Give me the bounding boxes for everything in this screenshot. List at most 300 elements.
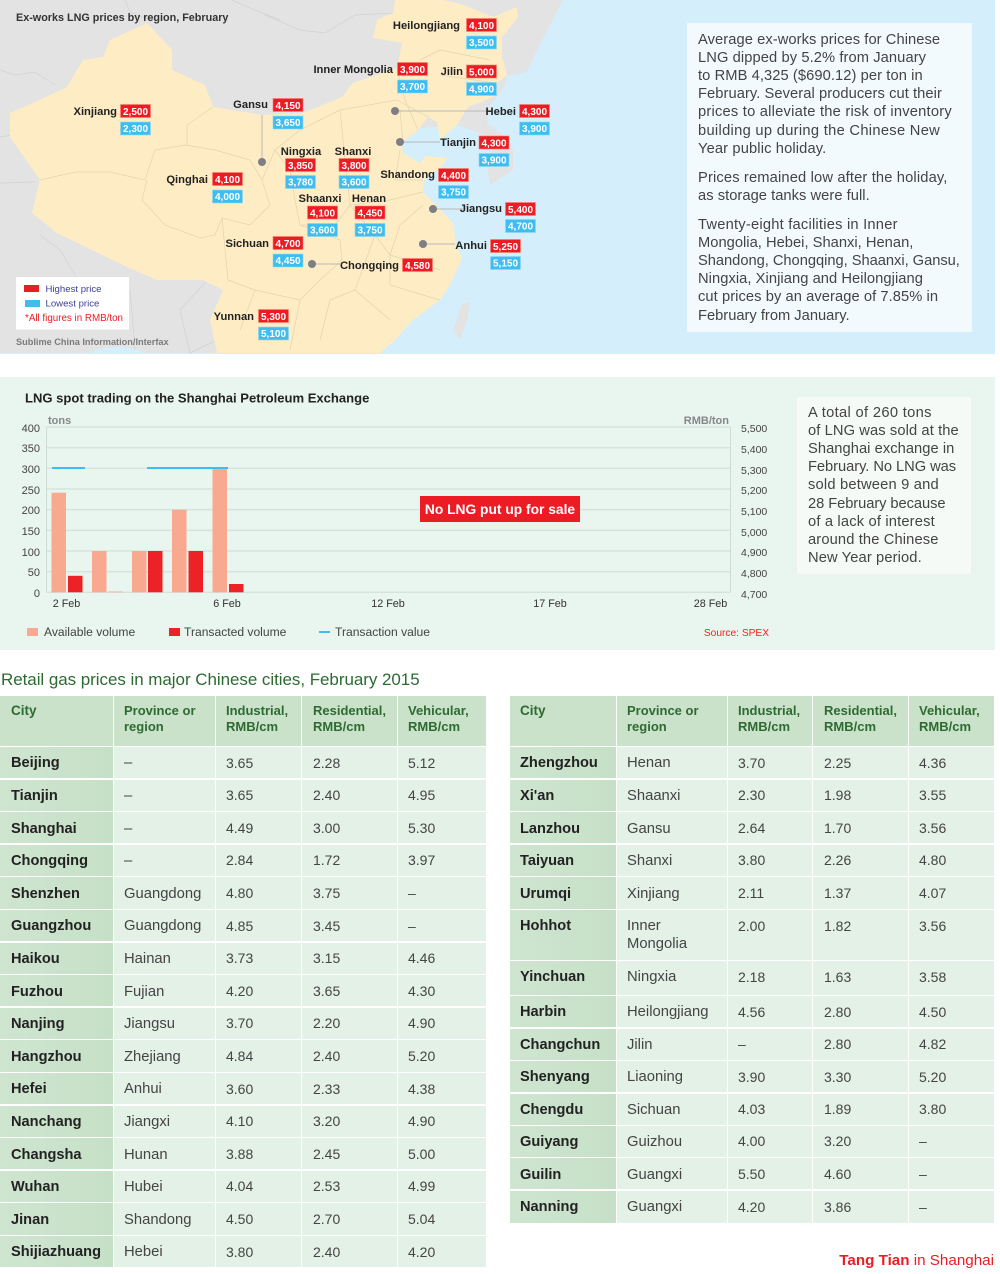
left axis labels: 400	[22, 423, 40, 435]
row: Wuhan: 4.04	[226, 1178, 253, 1194]
left axis labels: 0	[34, 588, 40, 600]
row: Changsha: Hunan	[124, 1147, 168, 1163]
row: Taiyuan: Shanxi	[627, 853, 672, 869]
paragraph: price dip: Average ex-works prices for Chinese	[698, 32, 940, 48]
row: Jinan: Jinan	[11, 1212, 49, 1228]
row: Lanzhou: 2.64	[738, 820, 765, 836]
header row: City	[520, 703, 546, 718]
row: Jinan: 5.04	[408, 1211, 435, 1227]
Jilin: Jilin	[441, 66, 463, 78]
available volume bars	[52, 468, 227, 592]
callout: no LNG put up for sale	[420, 496, 580, 522]
row: Guiyang	[510, 1126, 994, 1157]
row: Shenyang: Liaoning	[627, 1069, 683, 1085]
Chongqing: 4,580	[405, 261, 430, 272]
row: Shenzhen: Shenzhen	[11, 886, 80, 902]
row: Shenyang: 3.30	[824, 1069, 851, 1085]
leader lines and markers	[258, 107, 487, 268]
paragraph: price dip	[698, 32, 952, 157]
paragraph: price dip: building up during the Chinese New	[698, 123, 940, 139]
header row: Province or	[627, 703, 699, 718]
row: Hangzhou	[0, 1040, 486, 1072]
title: Ex-works LNG prices by region, February	[16, 12, 228, 24]
row: Zhengzhou	[510, 747, 994, 778]
Ningxia: 3,850	[288, 161, 313, 172]
paragraph: storage tanks: as storage tanks were full.	[698, 188, 870, 204]
text panel: exchange summary	[797, 396, 971, 574]
Yunnan: Yunnan	[214, 311, 254, 323]
header row: region	[627, 719, 667, 734]
right axis labels: 5,300	[741, 465, 767, 477]
paragraph: exchange volume: around the Chinese	[808, 532, 939, 548]
Henan: Henan	[352, 193, 386, 205]
row: Haikou	[0, 943, 486, 974]
paragraph: exchange volume: sold between 9 and	[808, 477, 939, 493]
row: Hohhot: 1.82	[824, 918, 851, 934]
row: Guangzhou: –	[408, 918, 416, 934]
left axis labels: 300	[22, 464, 40, 476]
Ningxia: Ningxia	[281, 146, 322, 158]
row: Chongqing: Chongqing	[11, 853, 88, 869]
row: Lanzhou: Gansu	[627, 821, 671, 837]
row: Hefei: Hefei	[11, 1081, 47, 1097]
left axis labels: 50	[28, 567, 40, 579]
Ningxia	[281, 146, 322, 188]
Qinghai: 4,000	[215, 192, 240, 203]
Jiangsu	[460, 202, 536, 232]
Henan: 3,750	[357, 226, 383, 236]
Yunnan: 5,100	[261, 329, 286, 340]
Shanxi: Shanxi	[335, 146, 371, 158]
map source: Sublime China Information/Interfax	[16, 337, 170, 347]
row: Hefei: 3.60	[226, 1081, 253, 1097]
row: Nanjing: Nanjing	[11, 1016, 65, 1032]
row: Zhengzhou: 3.70	[738, 755, 765, 771]
row: Taiyuan	[510, 845, 994, 876]
row: Shijiazhuang: 2.40	[313, 1244, 340, 1260]
row: Nanjing	[0, 1008, 486, 1039]
row: Nanchang: 4.10	[226, 1113, 253, 1129]
left axis labels: 100	[22, 547, 40, 559]
row: Fuzhou: Fuzhou	[11, 984, 63, 1000]
row: Guangzhou: 3.45	[313, 918, 340, 934]
paragraph: price dip: February. Several producers cut their	[698, 86, 942, 102]
row: Nanjing: 2.20	[313, 1015, 340, 1031]
paragraph: price dip: Year public holiday.	[698, 141, 826, 157]
Sichuan: 4,450	[275, 256, 301, 267]
Yunnan: 5,300	[261, 312, 286, 323]
Shandong	[380, 168, 468, 198]
row: Nanchang: Jiangxi	[124, 1114, 170, 1130]
right axis labels: 5,000	[741, 527, 767, 539]
row: Nanning: Nanning	[520, 1199, 578, 1215]
header row: region	[124, 719, 164, 734]
table: retail gas prices, right	[510, 696, 994, 1223]
Inner Mongolia: 3,700	[400, 82, 425, 93]
paragraph: facilities: Shandong, Chongqing, Shaanxi, Gansu,	[698, 253, 960, 269]
Hebei: Hebei	[486, 106, 516, 118]
row: Beijing: –	[124, 755, 132, 771]
row: Shijiazhuang: 4.20	[408, 1244, 435, 1260]
right axis labels: 5,400	[741, 444, 767, 456]
row: Lanzhou: Lanzhou	[520, 821, 580, 837]
row: Hefei: 4.38	[408, 1081, 435, 1097]
paragraph: exchange volume: 28 February because	[808, 496, 945, 512]
row: Nanjing: 3.70	[226, 1015, 253, 1031]
header row: Vehicular,	[919, 703, 980, 718]
Gansu	[233, 98, 303, 129]
row: Haikou: Hainan	[124, 951, 171, 967]
row: Zhengzhou: 2.25	[824, 755, 851, 771]
row: Jinan: 4.50	[226, 1211, 253, 1227]
row: Shenzhen: –	[408, 885, 416, 901]
row: Fuzhou: 3.65	[313, 983, 340, 999]
chart legend: Available volume	[44, 625, 135, 639]
row: Guiyang: Guizhou	[627, 1134, 682, 1150]
chart legend	[27, 625, 430, 639]
region labels and price tags	[73, 18, 550, 340]
row: Haikou: Haikou	[11, 951, 60, 967]
row: Beijing: 3.65	[226, 755, 253, 771]
row: Chongqing: 3.97	[408, 852, 435, 868]
row: Hangzhou: 2.40	[313, 1048, 340, 1064]
row: Hefei: 2.33	[313, 1081, 340, 1097]
Sichuan: Sichuan	[225, 238, 269, 250]
Chongqing: Chongqing	[340, 260, 399, 272]
right axis labels: 4,900	[741, 547, 767, 559]
row: Shanghai	[0, 812, 486, 843]
row: Guangzhou	[0, 910, 486, 941]
row: Chengdu: 1.89	[824, 1101, 851, 1117]
right axis labels: 5,500	[741, 423, 767, 435]
right axis labels: 4,800	[741, 568, 767, 580]
axis units: tons	[48, 415, 71, 427]
row: Guilin	[510, 1158, 994, 1189]
row: Changsha	[0, 1138, 486, 1169]
row: Beijing: 5.12	[408, 755, 435, 771]
row: Guiyang: 4.00	[738, 1133, 765, 1149]
byline: Tang Tian in Shanghai	[839, 1252, 994, 1269]
Xinjiang	[73, 104, 150, 135]
x axis labels: 2 Feb	[53, 598, 80, 610]
row: Lanzhou: 1.70	[824, 820, 851, 836]
row: Taiyuan: Taiyuan	[520, 853, 574, 869]
Xinjiang: 2,300	[123, 124, 148, 135]
row: Fuzhou: 4.30	[408, 983, 435, 999]
header row: RMB/cm	[919, 719, 971, 734]
Tianjin: 4,300	[481, 138, 507, 150]
Hebei: 3,900	[522, 124, 547, 135]
row: Shenzhen: Guangdong	[124, 886, 201, 902]
row: Shanghai: –	[124, 821, 132, 837]
Shanxi	[335, 146, 371, 188]
row: Shenyang: 5.20	[919, 1069, 946, 1085]
row: Guiyang: Guiyang	[520, 1134, 578, 1150]
map legend: Lowest price	[46, 298, 99, 310]
header row: Industrial,	[738, 703, 800, 718]
Inner Mongolia: Inner Mongolia	[313, 64, 394, 76]
row: Xi'an: Xi'an	[520, 788, 554, 804]
row: Hefei: Anhui	[124, 1081, 162, 1097]
Anhui: Anhui	[455, 240, 487, 252]
row: Xi'an: 1.98	[824, 787, 851, 803]
row: Fuzhou: Fujian	[124, 984, 164, 1000]
row: Changsha: 5.00	[408, 1146, 435, 1162]
paragraph: facilities	[698, 216, 960, 324]
row: Harbin: 4.50	[919, 1004, 946, 1020]
Inner Mongolia: 3,900	[400, 65, 425, 76]
row: Zhengzhou: Zhengzhou	[520, 755, 598, 771]
row: Shenzhen	[0, 877, 486, 909]
row: Guilin: 5.50	[738, 1166, 765, 1182]
Heilongjiang: Heilongjiang	[393, 20, 460, 32]
header row: Residential,	[824, 703, 897, 718]
right axis labels	[741, 423, 767, 601]
Shanxi: 3,600	[341, 178, 367, 188]
row: Tianjin	[0, 780, 486, 811]
paragraph: price dip: prices to alleviate the risk of inventory	[698, 104, 952, 120]
paragraph: exchange volume: February. No LNG was	[808, 459, 956, 475]
Jiangsu: 5,400	[508, 205, 533, 216]
row: Harbin: Harbin	[520, 1004, 566, 1020]
row: Nanchang: 3.20	[313, 1113, 340, 1129]
chart source: Source: SPEX	[704, 628, 769, 639]
row: Haikou: 3.73	[226, 950, 253, 966]
row: Chengdu: 3.80	[919, 1101, 946, 1117]
Tianjin: Tianjin	[440, 137, 476, 149]
Sichuan	[225, 236, 303, 267]
row: Yinchuan: 3.58	[919, 969, 946, 985]
map legend: Highest price	[46, 284, 102, 295]
row: Xi'an	[510, 780, 994, 811]
Heilongjiang	[393, 18, 496, 49]
row: Shenzhen: 3.75	[313, 885, 340, 901]
Sichuan: 4,700	[275, 239, 301, 250]
row: Wuhan: 4.99	[408, 1178, 435, 1194]
row: Nanjing: 4.90	[408, 1015, 435, 1031]
paragraph: facilities: Ningxia, Xinjiang and Heilongjiang	[698, 271, 923, 287]
left axis labels: 200	[22, 505, 40, 517]
header row: Industrial,	[226, 703, 288, 718]
paragraph: facilities: Twenty-eight facilities in Inner	[698, 216, 898, 232]
header row: Residential,	[313, 703, 386, 718]
Tianjin	[440, 136, 509, 166]
row: Changchun	[510, 1029, 994, 1060]
row: Changchun: 2.80	[824, 1036, 851, 1052]
row: Jinan: 2.70	[313, 1211, 340, 1227]
grid	[46, 427, 730, 592]
row: Wuhan: Hubei	[124, 1179, 163, 1195]
row: Xi'an: 2.30	[738, 787, 765, 803]
map legend: *All figures in RMB/ton	[25, 313, 123, 324]
paragraph: exchange volume: A total of 260 tons	[808, 404, 932, 420]
header row: Province or	[124, 703, 196, 718]
Anhui	[455, 240, 520, 270]
axis units	[48, 415, 729, 427]
Gansu: 4,150	[275, 101, 301, 112]
row: Urumqi: Xinjiang	[627, 886, 680, 902]
row: Beijing	[0, 747, 486, 778]
row: Tianjin: Tianjin	[11, 788, 58, 804]
row: Changchun: Jilin	[627, 1037, 652, 1053]
Shaanxi	[299, 193, 341, 236]
row: Chengdu: 4.03	[738, 1101, 765, 1117]
row: Shanghai: 3.00	[313, 820, 340, 836]
Qinghai: 4,100	[215, 175, 240, 186]
row: Changsha: 3.88	[226, 1146, 253, 1162]
row: Changsha: 2.45	[313, 1146, 340, 1162]
header row: RMB/cm	[824, 719, 876, 734]
row: Lanzhou: 3.56	[919, 820, 946, 836]
row: Nanning	[510, 1191, 994, 1223]
row: Guiyang: –	[919, 1133, 927, 1149]
row: Chongqing	[0, 845, 486, 876]
table: retail gas prices, left	[0, 696, 486, 1267]
row: Wuhan	[0, 1171, 486, 1202]
Henan	[352, 193, 386, 236]
row: Yinchuan: Ningxia	[627, 969, 676, 985]
Anhui: 5,250	[493, 242, 518, 253]
Chongqing	[340, 258, 432, 272]
Shandong: Shandong	[380, 169, 435, 181]
Henan: 4,450	[357, 208, 383, 220]
row: Changchun: –	[738, 1036, 746, 1052]
header row	[0, 696, 486, 746]
row: Hohhot: Mongolia	[627, 936, 687, 952]
row: Hohhot	[510, 910, 994, 960]
Anhui: 5,150	[493, 258, 518, 270]
row: Haikou: 3.15	[313, 950, 340, 966]
paragraph: exchange volume	[808, 404, 959, 566]
row: Jinan: Shandong	[124, 1212, 191, 1228]
left axis labels: 150	[22, 526, 40, 538]
x axis labels: 17 Feb	[533, 598, 567, 610]
row: Tianjin: 2.40	[313, 787, 340, 803]
header row	[510, 696, 994, 746]
Heilongjiang: 3,500	[469, 38, 494, 49]
Shandong: 3,750	[441, 188, 466, 198]
paragraph: exchange volume: of a lack of interest	[808, 514, 935, 530]
land: neighbouring countries	[0, 0, 563, 365]
row: Hangzhou: Zhejiang	[124, 1049, 181, 1065]
row: Chongqing: –	[124, 853, 132, 869]
Hebei	[486, 104, 550, 135]
row: Changchun: 4.82	[919, 1036, 946, 1052]
row: Tianjin: –	[124, 788, 132, 804]
Jilin: 5,000	[469, 68, 494, 78]
paragraph: exchange volume: New Year period.	[808, 550, 922, 566]
callout: no LNG put up for sale: No LNG put up for sale	[425, 502, 575, 517]
row: Yinchuan	[510, 961, 994, 995]
Tianjin: 3,900	[481, 156, 507, 166]
Qinghai	[166, 172, 242, 203]
Jiangsu: 4,700	[508, 222, 533, 232]
row: Guilin: –	[919, 1166, 927, 1182]
row: Taiyuan: 2.26	[824, 852, 851, 868]
row: Shijiazhuang: Shijiazhuang	[11, 1244, 101, 1260]
row: Guilin: Guangxi	[627, 1167, 682, 1183]
x axis labels	[53, 598, 727, 610]
row: Taiyuan: 4.80	[919, 852, 946, 868]
right axis labels: 5,100	[741, 506, 767, 518]
left axis labels: 250	[22, 485, 40, 497]
row: Shanghai: Shanghai	[11, 821, 77, 837]
header row: RMB/cm	[408, 719, 460, 734]
row: Hohhot: Hohhot	[520, 918, 571, 934]
row: Shijiazhuang: 3.80	[226, 1244, 253, 1260]
row: Hangzhou: Hangzhou	[11, 1049, 82, 1065]
table heading: Retail gas prices in major Chinese cities, February 2015	[1, 670, 420, 689]
Ningxia: 3,780	[288, 178, 313, 188]
row: Nanning: –	[919, 1199, 927, 1215]
header row: Vehicular,	[408, 703, 469, 718]
row: Beijing: Beijing	[11, 755, 60, 771]
paragraph: storage tanks	[698, 170, 948, 204]
row: Urumqi: 1.37	[824, 885, 851, 901]
row: Harbin	[510, 996, 994, 1027]
land: China	[10, 0, 518, 353]
row: Wuhan: Wuhan	[11, 1179, 59, 1195]
paragraph: exchange volume: of LNG was sold at the	[808, 423, 959, 439]
row: Fuzhou	[0, 975, 486, 1006]
map panel: ex-works LNG prices by region	[0, 0, 995, 354]
row: Hohhot: Inner	[627, 918, 661, 934]
Gansu: 3,650	[275, 118, 301, 129]
row: Harbin: 2.80	[824, 1004, 851, 1020]
right axis labels: 4,700	[741, 589, 767, 601]
Gansu: Gansu	[233, 99, 268, 111]
transaction value line	[52, 467, 228, 469]
transacted volume bars	[68, 551, 244, 592]
row: Nanning: Guangxi	[627, 1199, 682, 1215]
row: Guiyang: 3.20	[824, 1133, 851, 1149]
row: Beijing: 2.28	[313, 755, 340, 771]
paragraph: price dip: to RMB 4,325 ($690.12) per ton in	[698, 68, 923, 84]
Heilongjiang: 4,100	[469, 21, 494, 32]
row: Jinan	[0, 1203, 486, 1235]
row: Guangzhou: Guangzhou	[11, 918, 91, 934]
row: Zhengzhou: Henan	[627, 755, 671, 771]
left axis labels: 350	[22, 443, 40, 455]
row: Chongqing: 1.72	[313, 852, 340, 868]
Inner Mongolia	[313, 62, 428, 93]
row: Yinchuan: 2.18	[738, 969, 765, 985]
row: Changsha: Changsha	[11, 1147, 82, 1163]
row: Guilin: 4.60	[824, 1166, 851, 1182]
map legend	[16, 277, 129, 330]
left axis labels	[22, 423, 40, 600]
row: Nanchang: 4.90	[408, 1113, 435, 1129]
row: Guangzhou: Guangdong	[124, 918, 201, 934]
row: Xi'an: 3.55	[919, 787, 946, 803]
header row: City	[11, 703, 37, 718]
Hebei: 4,300	[522, 107, 547, 118]
chart legend: Transaction value	[335, 625, 430, 639]
row: Nanjing: Jiangsu	[124, 1016, 175, 1032]
row: Urumqi	[510, 877, 994, 909]
row: Hangzhou: 4.84	[226, 1048, 253, 1064]
header row: RMB/cm	[313, 719, 365, 734]
Yunnan	[214, 310, 288, 340]
row: Hohhot: 2.00	[738, 918, 765, 934]
Jiangsu: Jiangsu	[460, 203, 502, 215]
x axis labels: 6 Feb	[213, 598, 241, 610]
row: Haikou: 4.46	[408, 950, 435, 966]
chart panel: LNG spot trading	[0, 377, 995, 650]
row: Urumqi: Urumqi	[520, 886, 571, 902]
paragraph: facilities: cut prices by an average of 7.85% in	[698, 289, 938, 305]
header row: RMB/cm	[226, 719, 278, 734]
